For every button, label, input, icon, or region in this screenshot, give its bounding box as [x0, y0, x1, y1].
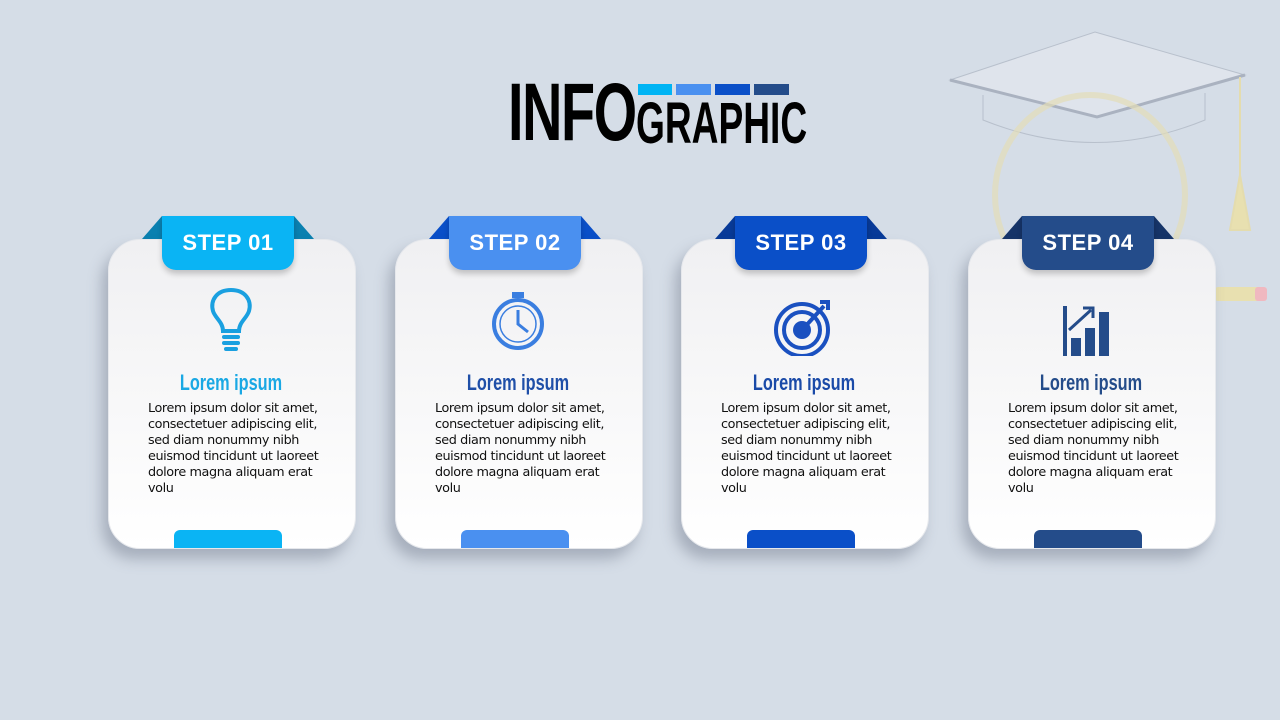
- tab: STEP 01: [182, 230, 274, 255]
- tab: [162, 216, 294, 270]
- background graduation cap: [948, 32, 1267, 301]
- tab: STEP 04: [1042, 230, 1134, 255]
- card: step 04: [955, 216, 1217, 566]
- icon: target: [774, 300, 830, 356]
- heading: Lorem ipsum: [467, 370, 569, 395]
- title: [508, 67, 807, 158]
- title bars: [638, 84, 789, 95]
- icon: bulb: [210, 288, 252, 351]
- tab: [735, 216, 867, 270]
- text: Lorem ipsum dolor sit amet, consectetuer adipiscing elit, sed diam nonummy nibh euismod tincidunt ut laoreet dolore magna aliquam erat volu: [721, 401, 891, 496]
- icon: stopwatch: [492, 292, 544, 350]
- card: step 03: [668, 216, 930, 566]
- text: Lorem ipsum dolor sit amet, consectetuer adipiscing elit, sed diam nonummy nibh euismod tincidunt ut laoreet dolore magna aliquam erat volu: [435, 401, 605, 496]
- tab: [1022, 216, 1154, 270]
- tab: [449, 216, 581, 270]
- heading: Lorem ipsum: [753, 370, 855, 395]
- title: INFO: [508, 67, 636, 158]
- card: step 02: [382, 216, 644, 566]
- icon: chart: [1063, 306, 1109, 356]
- text: Lorem ipsum dolor sit amet, consectetuer adipiscing elit, sed diam nonummy nibh euismod tincidunt ut laoreet dolore magna aliquam erat volu: [1008, 401, 1178, 496]
- card: step 01: [95, 216, 357, 566]
- tab: STEP 03: [755, 230, 847, 255]
- tab: STEP 02: [469, 230, 561, 255]
- heading: Lorem ipsum: [1040, 370, 1142, 395]
- title: GRAPHIC: [636, 91, 807, 156]
- text: Lorem ipsum dolor sit amet, consectetuer adipiscing elit, sed diam nonummy nibh euismod tincidunt ut laoreet dolore magna aliquam erat volu: [148, 401, 318, 496]
- heading: Lorem ipsum: [180, 370, 282, 395]
